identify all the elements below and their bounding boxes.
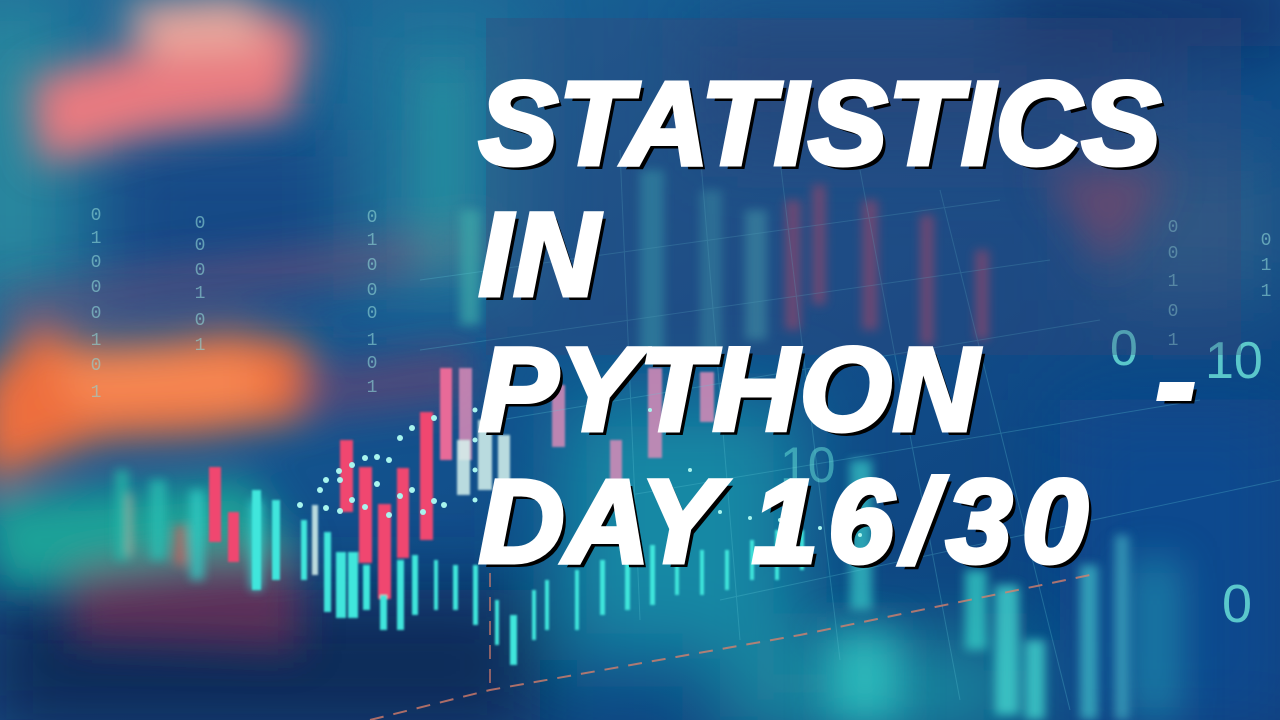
background: blurred financial chart: 10: [780, 437, 836, 493]
grid lines: [420, 150, 1280, 710]
background: blurred financial chart: 0: [195, 311, 205, 331]
text: IN: [479, 189, 601, 321]
background: blurred financial chart: 0: [1261, 231, 1271, 251]
background: blurred financial chart: 1: [1261, 256, 1271, 276]
text: STATISTICS: [479, 58, 1162, 190]
background: blurred financial chart: 0: [91, 356, 101, 376]
background: blurred financial chart: 0: [367, 354, 377, 374]
text: DAY 16/30: [479, 456, 1098, 588]
background: blurred financial chart: 0: [367, 281, 377, 301]
background: blurred financial chart: 0: [1168, 244, 1178, 264]
text: -: [1156, 316, 1195, 448]
background: blurred financial chart: 0: [1168, 302, 1178, 322]
text: PYTHON: [479, 324, 980, 456]
orange blur band: [0, 325, 310, 485]
background: blurred financial chart: 0: [1168, 218, 1178, 238]
candles: [209, 368, 452, 599]
background: blurred financial chart: 0: [1222, 574, 1252, 634]
teal lower band: [0, 480, 300, 590]
background: blurred financial chart: 1: [1261, 282, 1271, 302]
background: blurred financial chart: 1: [91, 331, 101, 351]
background: blurred financial chart: 1: [1168, 331, 1178, 351]
background: blurred financial chart: 0: [91, 206, 101, 226]
background: blurred financial chart: 0: [367, 208, 377, 228]
background: blurred financial chart: 0: [195, 236, 205, 256]
background: blurred financial chart: 1: [91, 229, 101, 249]
background: blurred financial chart: 1: [91, 383, 101, 403]
background: blurred financial chart: 1: [195, 284, 205, 304]
background: blurred financial chart: 0: [195, 261, 205, 281]
background: blurred financial chart: 1: [195, 336, 205, 356]
background: blurred financial chart: 10: [1205, 332, 1263, 390]
background: blurred financial chart: 1: [367, 231, 377, 251]
background: blurred financial chart: 0: [367, 256, 377, 276]
background: blurred financial chart: 0: [91, 278, 101, 298]
background: blurred financial chart: 0: [1110, 320, 1138, 376]
background: blurred financial chart: 1: [1168, 272, 1178, 292]
pink top-left blur: [30, 5, 310, 165]
background: blurred financial chart: 1: [367, 331, 377, 351]
red lower glow: [70, 550, 300, 650]
background: blurred financial chart: 0: [91, 253, 101, 273]
background: blurred financial chart: 0: [367, 304, 377, 324]
background: blurred financial chart: 1: [367, 378, 377, 398]
translucent title panel: [486, 18, 1241, 355]
background: blurred financial chart: 0: [195, 214, 205, 234]
title: [478, 58, 1197, 588]
background: blurred financial chart: 0: [91, 304, 101, 324]
